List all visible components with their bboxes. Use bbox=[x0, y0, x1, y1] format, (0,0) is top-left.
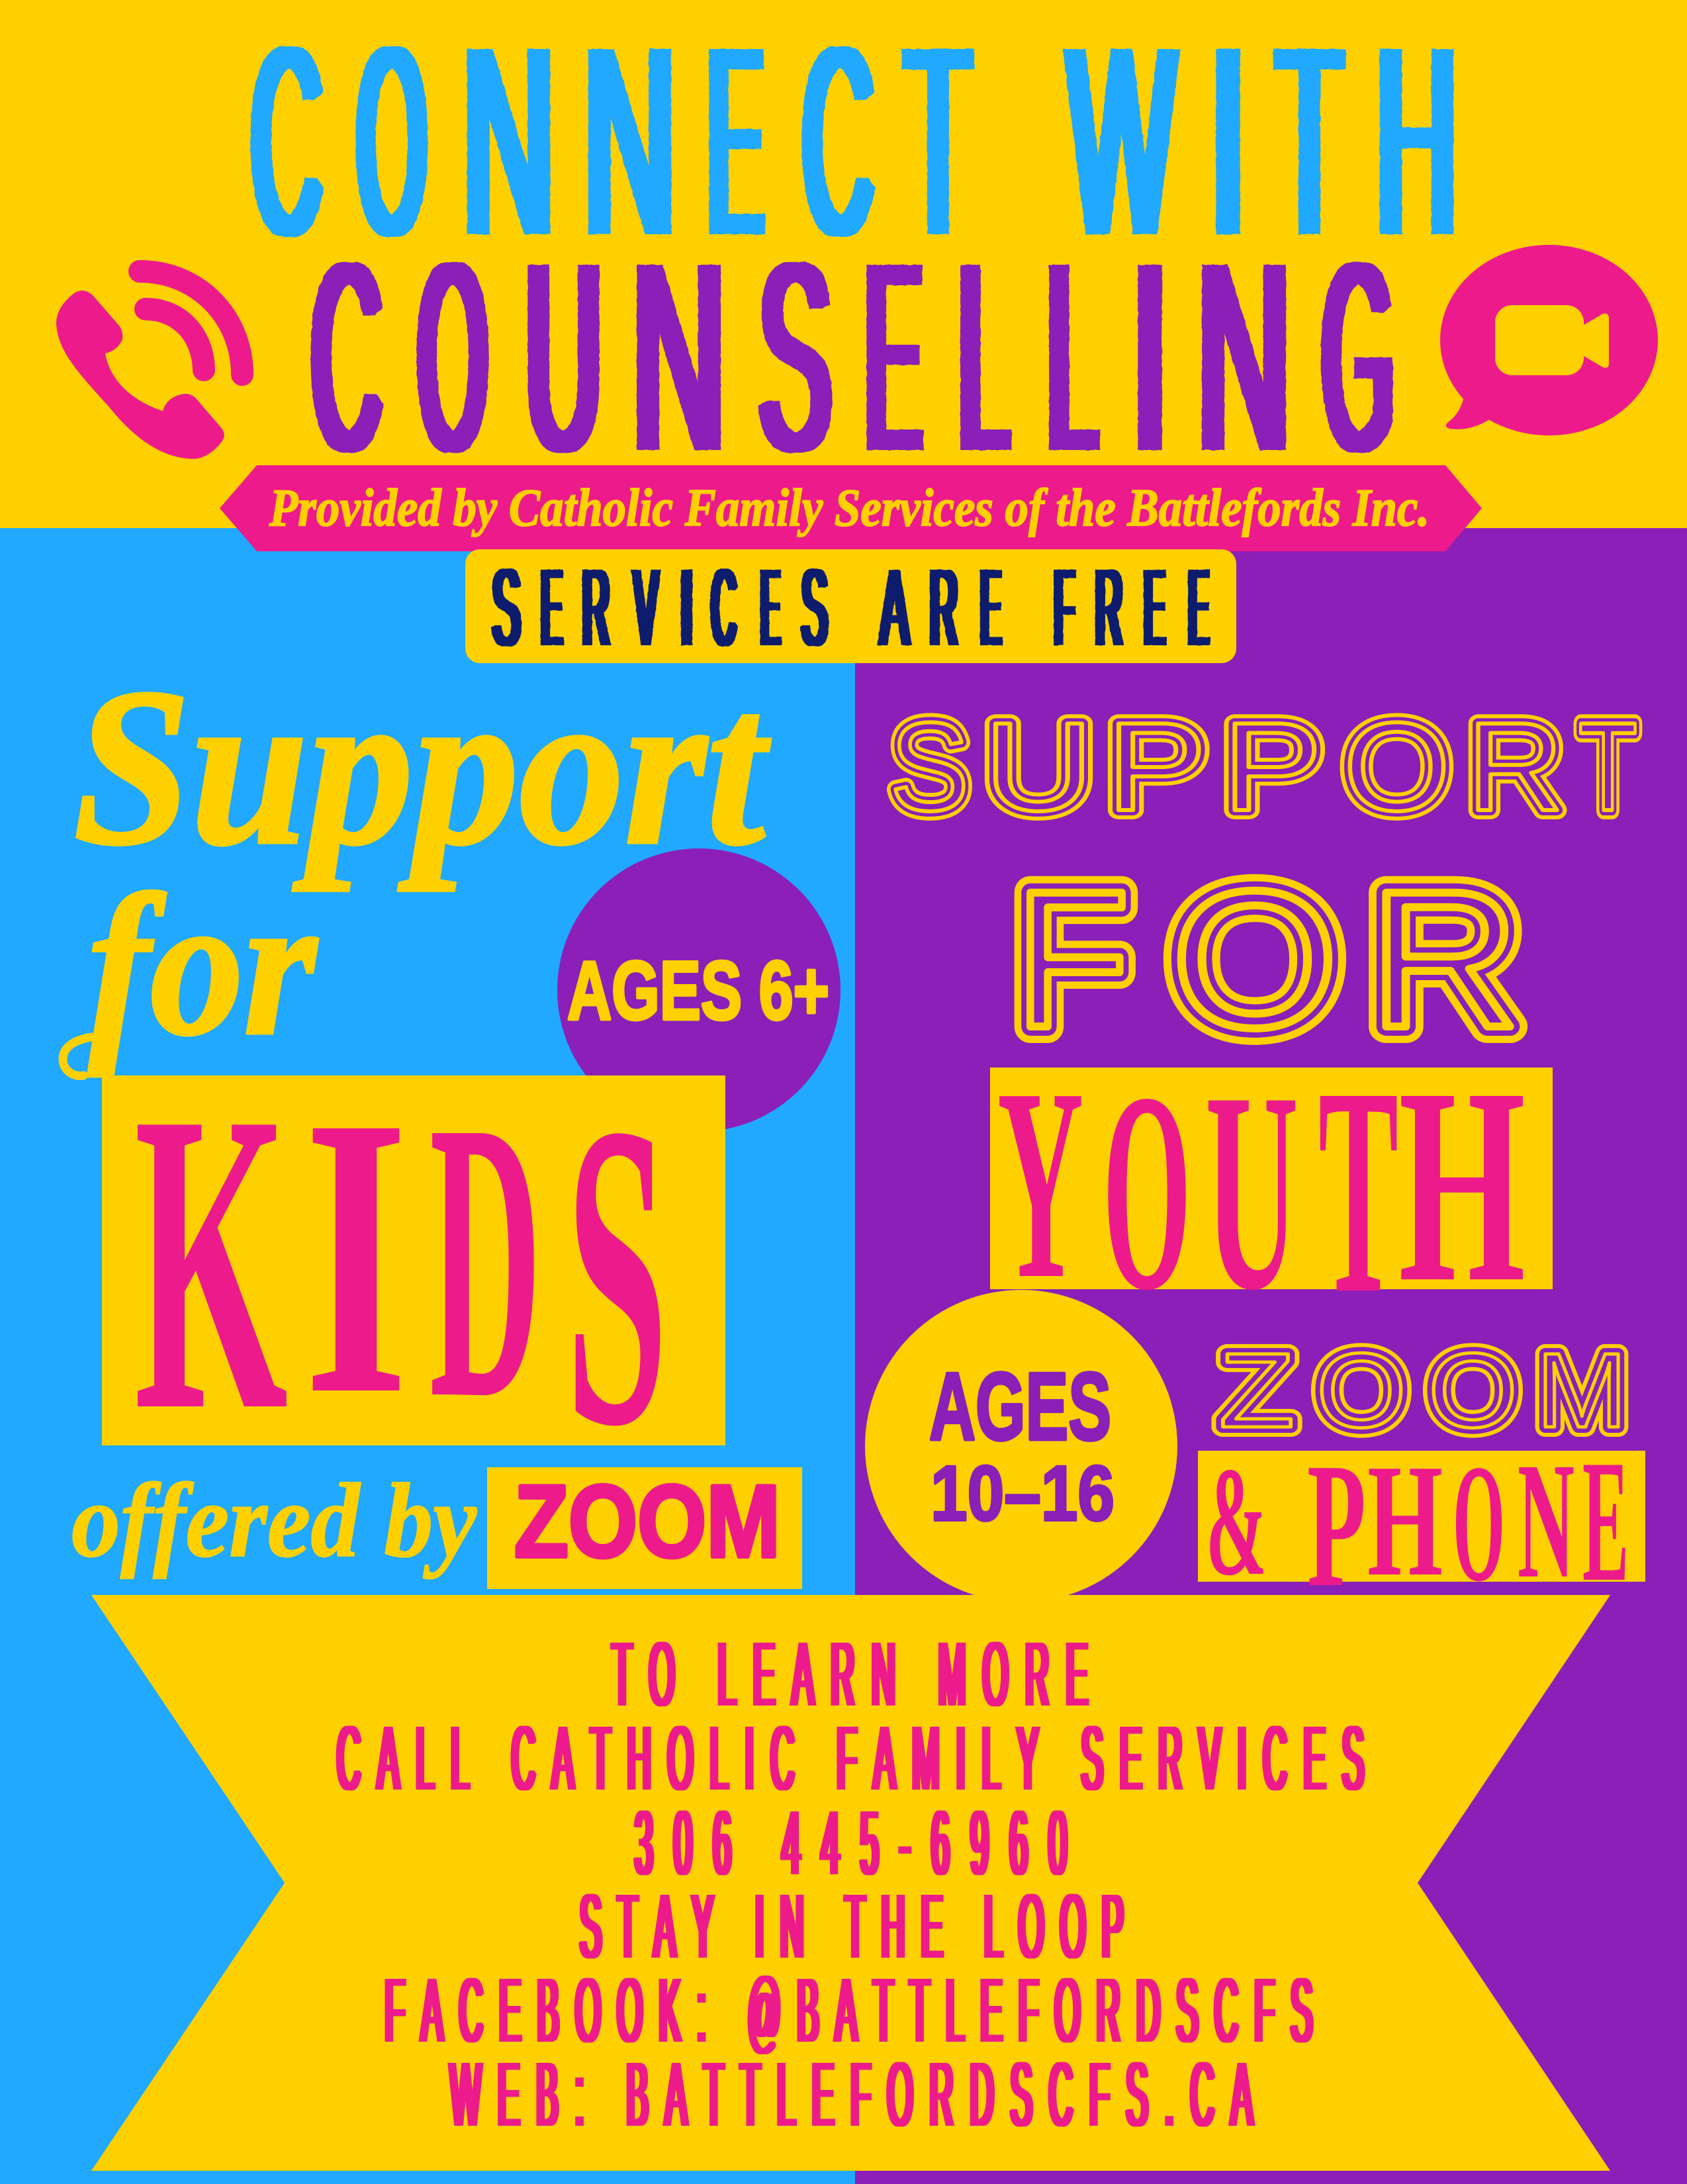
text block: contact lines: TO LEARN MORE bbox=[612, 1623, 1088, 1725]
badge: ages 10-16 bbox=[865, 1290, 1177, 1602]
title line: counselling: C bbox=[312, 207, 381, 508]
heading: striped zoom: Z bbox=[1219, 1331, 1295, 1449]
heading: striped for: F bbox=[1015, 851, 1129, 1068]
title line: counselling: E bbox=[866, 207, 921, 508]
heading: youth: Y bbox=[997, 1031, 1083, 1336]
badge text: E bbox=[981, 547, 1001, 669]
heading: striped support: P bbox=[1107, 697, 1207, 837]
badge text: V bbox=[634, 547, 658, 669]
heading: striped support: P bbox=[1107, 697, 1207, 837]
panel: kids box: S bbox=[566, 1034, 668, 1516]
heading: support: Support bbox=[73, 642, 772, 891]
heading: striped support: P bbox=[1223, 697, 1322, 837]
heading: striped for: F bbox=[1015, 851, 1129, 1068]
heading: striped support: R bbox=[1467, 697, 1563, 837]
heading: striped zoom: O bbox=[1428, 1331, 1518, 1449]
title line: connect with: C bbox=[803, 0, 873, 292]
badge: services are free: E bbox=[1189, 547, 1208, 669]
heading: striped support: O bbox=[1344, 697, 1450, 837]
heading: striped support: O bbox=[1344, 697, 1450, 837]
badge text: E bbox=[761, 547, 780, 669]
heading: youth: H bbox=[1398, 1030, 1526, 1340]
title line: counselling: S bbox=[759, 207, 831, 508]
heading: & phone: P bbox=[1307, 1426, 1366, 1624]
heading: for: for bbox=[88, 853, 320, 1077]
heading: striped for: O bbox=[1171, 851, 1338, 1068]
title line: counselling: N bbox=[1197, 207, 1291, 508]
heading: striped support: R bbox=[1467, 697, 1563, 837]
heading: striped zoom: O bbox=[1316, 1331, 1406, 1449]
badge: services are free bbox=[465, 547, 1236, 669]
panel: top yellow header background bbox=[0, 0, 1687, 528]
heading: striped support: O bbox=[1344, 697, 1450, 837]
title line: connect with: N bbox=[463, 0, 555, 292]
heading: striped zoom: O bbox=[1428, 1331, 1518, 1449]
heading: striped support: T bbox=[1578, 697, 1637, 837]
heading: striped for bbox=[1015, 851, 1520, 1068]
heading: striped zoom: M bbox=[1537, 1331, 1627, 1449]
heading: striped support: S bbox=[890, 697, 969, 837]
heading: striped zoom: Z bbox=[1219, 1331, 1295, 1449]
title line: counselling: L bbox=[1048, 207, 1097, 508]
title line: connect with: O bbox=[357, 0, 426, 292]
heading: & phone: & bbox=[1206, 1435, 1267, 1608]
heading: striped support: P bbox=[1223, 697, 1322, 837]
heading: kids: D bbox=[430, 1040, 541, 1481]
heading: striped support: S bbox=[890, 697, 969, 837]
badge text: R bbox=[930, 547, 958, 669]
heading: striped support: S bbox=[890, 697, 969, 837]
heading: striped zoom: M bbox=[1537, 1331, 1627, 1449]
heading: striped zoom: M bbox=[1537, 1331, 1627, 1449]
heading: kids: K bbox=[134, 1023, 289, 1500]
heading: striped support: R bbox=[1467, 697, 1563, 837]
panel: youth purple background bbox=[855, 528, 1687, 2184]
badge text: R bbox=[1095, 547, 1122, 669]
title line: counselling: O bbox=[418, 207, 487, 508]
title line: connect with: C bbox=[251, 0, 322, 292]
heading: kids: I bbox=[304, 1034, 408, 1477]
heading: & phone: N bbox=[1518, 1428, 1574, 1613]
age range: 10–16 bbox=[931, 1450, 1115, 1537]
heading: striped support: P bbox=[1223, 697, 1322, 837]
badge text: C bbox=[711, 547, 736, 669]
heading: striped zoom: O bbox=[1316, 1331, 1406, 1449]
heading: striped for: R bbox=[1369, 851, 1520, 1068]
title line: counselling bbox=[312, 207, 1394, 508]
banner: contact information ribbon bbox=[91, 1595, 1610, 2171]
text block: contact lines bbox=[337, 1623, 1364, 2145]
text block: contact lines: FACEBOOK: @BATTLEFORDSCFS bbox=[385, 1959, 1312, 2061]
ages 6+ text: AGES 6+ bbox=[567, 945, 829, 1037]
badge text: S bbox=[492, 547, 520, 669]
title line: connect with: T bbox=[1277, 0, 1342, 292]
badge text: A bbox=[880, 547, 909, 669]
badge text: S bbox=[801, 547, 827, 669]
heading: striped for: F bbox=[1015, 851, 1129, 1068]
heading: striped zoom: O bbox=[1428, 1331, 1518, 1449]
icon: video call speech bubble bbox=[1440, 245, 1658, 435]
heading: striped support: T bbox=[1578, 697, 1637, 837]
text block: contact lines: STAY IN THE LOOP bbox=[580, 1875, 1124, 1977]
title line: connect with: E bbox=[708, 0, 763, 292]
title line: connect with: T bbox=[905, 0, 971, 292]
text block: contact lines: 306 445-6960 bbox=[635, 1792, 1067, 1893]
badge text: F bbox=[1054, 547, 1074, 669]
heading: striped zoom bbox=[1219, 1331, 1627, 1449]
badge text bbox=[492, 547, 1208, 669]
heading: striped support: U bbox=[984, 697, 1093, 837]
text block: contact lines: CALL CATHOLIC FAMILY SERVICES bbox=[337, 1707, 1364, 1809]
panel: youth box bbox=[990, 1026, 1553, 1355]
title line: connect with: I bbox=[1210, 0, 1246, 292]
panel: kids box bbox=[102, 1023, 725, 1516]
heading: youth: U bbox=[1205, 1034, 1299, 1349]
badge text: E bbox=[1144, 547, 1165, 669]
badge text: R bbox=[582, 547, 610, 669]
panel: kids blue background bbox=[0, 528, 855, 2184]
heading: striped support: U bbox=[984, 697, 1093, 837]
heading: striped zoom: Z bbox=[1219, 1331, 1295, 1449]
title line: counselling: N bbox=[632, 207, 725, 508]
zoom text: ZOOM bbox=[514, 1464, 780, 1578]
poster canvas: H bbox=[1377, 0, 1457, 292]
badge text: I bbox=[679, 547, 694, 669]
icon: telephone handset with signal waves bbox=[56, 271, 242, 459]
title line: counselling: L bbox=[959, 207, 1009, 508]
heading: youth: O bbox=[1103, 1034, 1191, 1349]
text block: contact lines: WEB: BATTLEFORDSCFS.CA bbox=[450, 2043, 1253, 2145]
title line: counselling: U bbox=[525, 207, 602, 508]
heading: & phone: O bbox=[1453, 1430, 1505, 1617]
title line: connect with: W bbox=[1068, 0, 1176, 292]
heading: youth: T bbox=[1318, 1026, 1398, 1355]
heading: striped for: O bbox=[1171, 851, 1338, 1068]
heading: striped zoom: O bbox=[1316, 1331, 1406, 1449]
heading: & phone: H bbox=[1367, 1431, 1443, 1610]
heading: striped support bbox=[890, 697, 1637, 837]
ribbon text: Provided by Catholic Family Services of the Battlefords Inc. bbox=[269, 479, 1430, 537]
heading: striped support: U bbox=[984, 697, 1093, 837]
heading: striped for: R bbox=[1369, 851, 1520, 1068]
ribbon: provider banner bbox=[220, 465, 1482, 551]
ages label: AGES bbox=[929, 1353, 1111, 1460]
poster canvas: G bbox=[1322, 207, 1394, 508]
panel: phone box bbox=[1198, 1424, 1645, 1624]
label: zoom box bbox=[487, 1464, 802, 1589]
badge: ages 6+ bbox=[557, 848, 841, 1132]
heading: striped support: P bbox=[1107, 697, 1207, 837]
title line: connect with bbox=[251, 0, 1457, 292]
title line: counselling: I bbox=[1132, 207, 1168, 508]
heading: striped support: T bbox=[1578, 697, 1637, 837]
heading: striped for: R bbox=[1369, 851, 1520, 1068]
title line: connect with: N bbox=[584, 0, 676, 292]
text: offered by: offered by bbox=[71, 1461, 477, 1579]
heading: striped for: O bbox=[1171, 851, 1338, 1068]
badge text: E bbox=[541, 547, 562, 669]
